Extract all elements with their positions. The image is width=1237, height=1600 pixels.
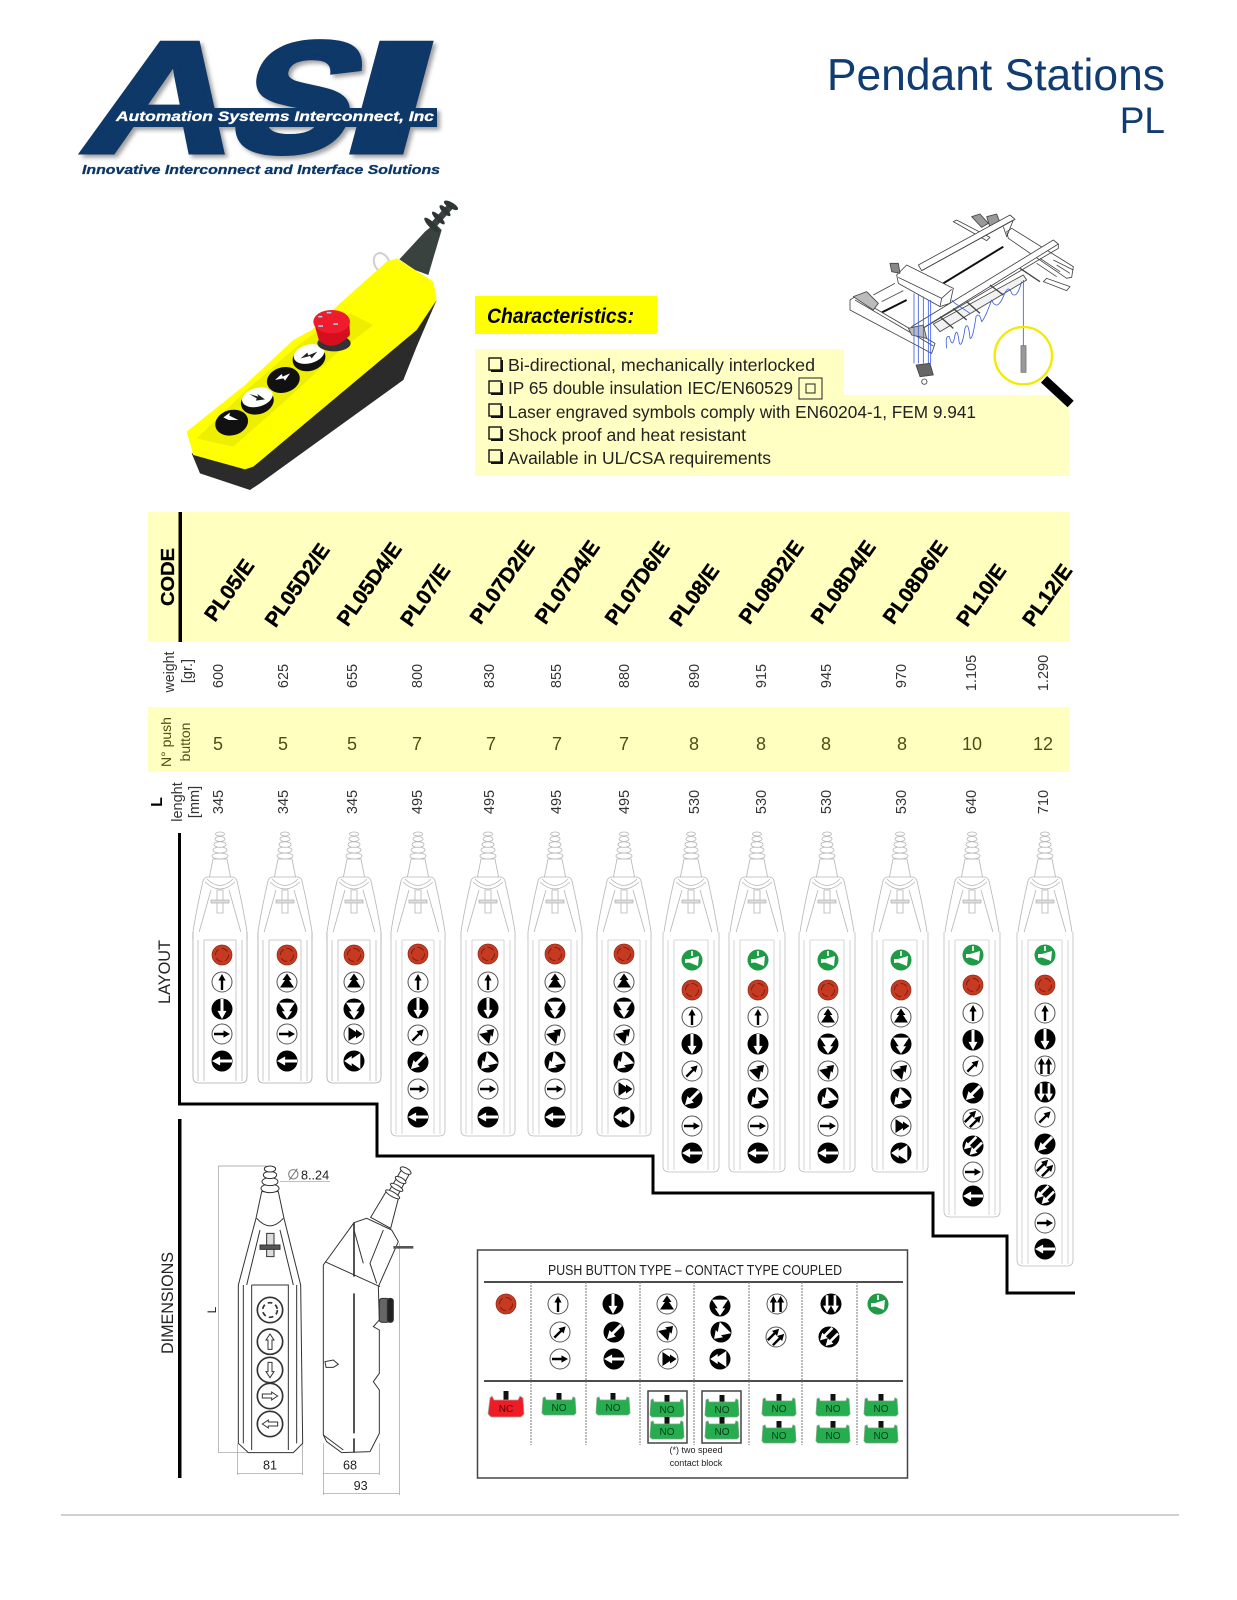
contact blocks: NO xyxy=(826,1431,841,1442)
dimension: depth 93: 93 xyxy=(354,1479,368,1493)
table: number of push buttons row: 7 xyxy=(552,734,562,754)
table: weight row: 855 xyxy=(549,664,565,688)
dimension: cable diameter: 8..24 xyxy=(301,1168,329,1182)
table: code row: PL10/E xyxy=(952,560,1011,631)
table: number of push buttons row: 7 xyxy=(412,734,422,754)
contact blocks: NO xyxy=(772,1431,787,1442)
table: length row: 495 xyxy=(482,790,498,814)
pendant: PL08D4/E xyxy=(799,832,855,1172)
icon: double insulation xyxy=(799,378,822,399)
table: code row: PL07/E xyxy=(396,560,455,631)
table: number of push buttons row: button xyxy=(177,723,193,761)
contact blocks xyxy=(488,1391,898,1443)
title: Pendant Stations xyxy=(827,51,1165,100)
table: weight row: weight xyxy=(162,651,178,693)
contact blocks: NO xyxy=(552,1403,567,1414)
table: code row xyxy=(148,512,1077,642)
dimension drawing xyxy=(205,1165,413,1495)
table: weight row: [gr.] xyxy=(180,659,196,683)
table: weight row: 880 xyxy=(617,664,633,688)
table: code row: PL07D4/E xyxy=(531,537,605,628)
label: layout: LAYOUT xyxy=(155,940,174,1004)
table: number of push buttons row: 5 xyxy=(347,734,357,754)
table: number of push buttons row: 7 xyxy=(486,734,496,754)
table: number of push buttons row: 8 xyxy=(756,734,766,754)
table: length row: 345 xyxy=(211,790,227,814)
table: code row: PL12/E xyxy=(1018,560,1077,631)
table: length row: 345 xyxy=(345,790,361,814)
dimension: length: L xyxy=(205,1306,219,1313)
table: weight row: 890 xyxy=(687,664,703,688)
subtitle: PL xyxy=(1120,100,1165,141)
table: code row: PL07D2/E xyxy=(466,537,540,628)
table: number of push buttons row: 8 xyxy=(689,734,699,754)
table: code row: PL05D4/E xyxy=(333,539,407,630)
table: length row: 530 xyxy=(819,790,835,814)
panel: push button type / contact type xyxy=(478,1250,908,1478)
logo company name: Automation Systems Interconnect, Inc xyxy=(115,108,434,124)
pendant: PL07D2/E xyxy=(461,832,515,1136)
table: length row: L xyxy=(149,797,166,807)
panel: characteristics heading xyxy=(475,296,657,334)
dimension: cable diameter xyxy=(289,1168,329,1182)
panel: characteristics list: Bi-directional, mechanically interlocked xyxy=(508,355,815,375)
logo xyxy=(69,10,458,186)
pendant: PL08D6/E xyxy=(872,832,928,1172)
table: length row: 530 xyxy=(754,790,770,814)
table: length row: lenght xyxy=(170,782,186,822)
logo letters ASI: S xyxy=(213,10,388,186)
contact blocks: NO xyxy=(826,1404,841,1415)
table: number of push buttons row xyxy=(148,707,1070,772)
table: code row: PL08D6/E xyxy=(879,537,953,628)
table: weight row: 915 xyxy=(754,664,770,688)
pendant: PL10/E xyxy=(944,832,1000,1217)
dimension: depth 68: 68 xyxy=(343,1458,357,1472)
table: weight row: 625 xyxy=(276,664,292,688)
table: weight row: 600 xyxy=(211,664,227,688)
table: length row: 345 xyxy=(276,790,292,814)
panel: characteristics list xyxy=(475,349,1070,476)
table: length row: 640 xyxy=(964,790,980,814)
footnote: (*) two speed xyxy=(669,1445,723,1455)
table: length row: 530 xyxy=(687,790,703,814)
table: number of push buttons row: 10 xyxy=(962,734,982,754)
panel: characteristics list: IP 65 double insulation IEC/EN60529 xyxy=(508,378,793,398)
footer rule xyxy=(61,1514,1179,1516)
table: weight row xyxy=(162,652,1052,693)
pendant: PL07D4/E xyxy=(528,832,582,1136)
contact blocks: NO xyxy=(714,1405,730,1416)
contact blocks: NO xyxy=(660,1427,675,1438)
table: weight row: 655 xyxy=(345,664,361,688)
table: code row: PL08D2/E xyxy=(735,537,809,628)
table: length row: 530 xyxy=(894,790,910,814)
table: code row: PL08/E xyxy=(665,560,724,631)
panel: characteristics list: Available in UL/CSA requirements xyxy=(508,448,771,468)
table: length row: 495 xyxy=(410,790,426,814)
pendant: PL12/E xyxy=(1017,832,1073,1266)
pendant: PL08D2/E xyxy=(729,832,785,1172)
contact blocks: NC xyxy=(499,1404,513,1415)
table: number of push buttons row: 8 xyxy=(821,734,831,754)
logo letters ASI: A xyxy=(69,10,262,186)
table: weight row: 1.290 xyxy=(1036,655,1052,691)
table: length row: 495 xyxy=(617,790,633,814)
contact blocks: NO xyxy=(772,1404,787,1415)
table: code row: PL05D2/E xyxy=(261,540,335,631)
dimension: width 81: 81 xyxy=(263,1458,277,1472)
contact blocks: NO xyxy=(874,1404,889,1415)
contact blocks: NO xyxy=(714,1427,730,1438)
stepped separator line between layout and dimensions xyxy=(180,833,1075,1293)
illustration: yellow pendant xyxy=(187,199,459,490)
row label: code: CODE xyxy=(158,548,178,606)
contact blocks: NO xyxy=(660,1405,675,1416)
table: code row: PL05/E xyxy=(200,555,259,626)
logo tagline: Innovative Interconnect and Interface Solutions xyxy=(82,162,440,177)
table: number of push buttons row: N° push xyxy=(158,717,174,767)
logo letters ASI xyxy=(69,10,458,186)
pendant: PL05D2/E xyxy=(258,832,312,1083)
table: number of push buttons row: 5 xyxy=(278,734,288,754)
title xyxy=(827,51,1165,141)
pendant: PL07D6/E xyxy=(597,832,651,1136)
table: length row xyxy=(149,782,1052,822)
table: length row: 710 xyxy=(1036,790,1052,814)
footnote xyxy=(669,1445,723,1468)
panel: characteristics heading: Characteristics: xyxy=(487,305,634,328)
panel: characteristics list: Shock proof and heat resistant xyxy=(508,425,746,445)
drawing: front view xyxy=(218,1166,330,1475)
table: number of push buttons row: 7 xyxy=(619,734,629,754)
button symbols xyxy=(496,1294,888,1370)
illustration: overhead crane with magnifier xyxy=(850,214,1073,404)
divider: dimensions xyxy=(178,1119,182,1478)
layout pendants xyxy=(193,832,1073,1266)
footnote: contact block xyxy=(670,1458,723,1468)
pendant: PL05/E xyxy=(193,832,247,1083)
table: length row: [mm] xyxy=(187,786,203,818)
table: weight row: 830 xyxy=(482,664,498,688)
table: weight row: 800 xyxy=(410,664,426,688)
table: code row: PL07D6/E xyxy=(601,538,675,629)
panel title: PUSH BUTTON TYPE – CONTACT TYPE COUPLED xyxy=(548,1262,842,1279)
table: number of push buttons row: 5 xyxy=(213,734,223,754)
drawing: side view xyxy=(323,1165,413,1495)
panel: characteristics list: Laser engraved symbols comply with EN60204-1, FEM 9.941 xyxy=(508,402,976,422)
pendant: PL05D4/E xyxy=(327,832,381,1083)
logo letters ASI: I xyxy=(325,10,458,186)
table: code row: PL08D4/E xyxy=(807,537,881,628)
contact blocks: NO xyxy=(874,1431,889,1442)
label: dimensions: DIMENSIONS xyxy=(158,1252,177,1354)
table: number of push buttons row: 8 xyxy=(897,734,907,754)
table: weight row: 945 xyxy=(819,664,835,688)
contact blocks: NO xyxy=(606,1403,621,1414)
table: number of push buttons row: 12 xyxy=(1033,734,1053,754)
pendant: PL07/E xyxy=(391,832,445,1136)
table: weight row: 1.105 xyxy=(964,655,980,691)
pendant: PL08/E xyxy=(663,832,719,1172)
table: weight row: 970 xyxy=(894,664,910,688)
table: length row: 495 xyxy=(549,790,565,814)
